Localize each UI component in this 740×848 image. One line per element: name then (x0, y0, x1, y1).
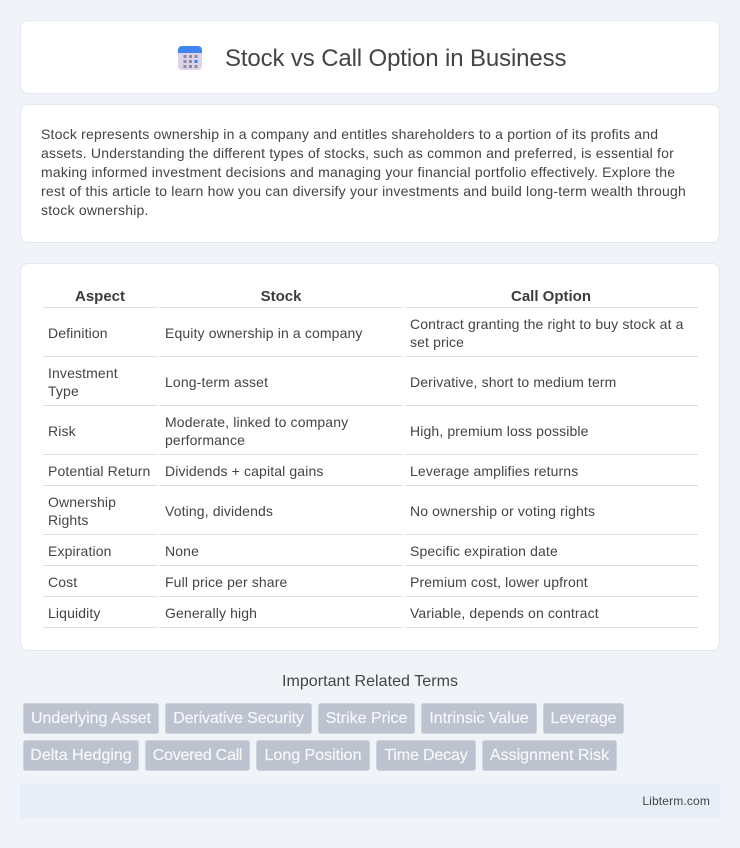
row: expiration: Specific expiration date (410, 543, 558, 559)
row: definition: Equity ownership in a company (165, 325, 363, 341)
text block: introduction: assets. Understanding the different types of stocks, such as common and preferred, is essential for (41, 145, 674, 161)
row: expiration: Expiration (48, 543, 112, 559)
row: definition: set price (410, 334, 464, 350)
icon: calendar (178, 46, 202, 70)
text block: introduction: making informed investment decisions and managing your financial portfolio effectively. Explore the (41, 164, 675, 180)
row: investment type: Investment (48, 365, 118, 381)
text block: introduction: stock ownership. (41, 202, 149, 218)
row: risk (48, 414, 589, 448)
text block: introduction (41, 126, 686, 218)
row: cost: Cost (48, 574, 77, 590)
row: liquidity (48, 605, 599, 621)
title: Stock vs Call Option in Business (225, 45, 566, 72)
row: ownership rights: Voting, dividends (165, 503, 273, 519)
tag list: related terms: Intrinsic Value (429, 710, 529, 727)
row: cost: Premium cost, lower upfront (410, 574, 588, 590)
tag list: related terms: Leverage (551, 710, 616, 727)
row: definition: Definition (48, 325, 108, 341)
panel: title header (20, 20, 720, 94)
row: risk: Moderate, linked to company (165, 414, 348, 430)
row: liquidity: Variable, depends on contract (410, 605, 599, 621)
table header (75, 288, 591, 305)
text block: introduction: Stock represents ownership in a company and entitles shareholders to a portion of its profits and (41, 126, 658, 142)
row: ownership rights: Rights (48, 512, 88, 528)
row: investment type: Long-term asset (165, 374, 268, 390)
row: potential return: Potential Return (48, 463, 150, 479)
tag list: related terms: Underlying Asset (31, 710, 151, 727)
row: cost (48, 574, 588, 590)
footer credit: Libterm.com (642, 794, 710, 808)
row: cost: Full price per share (165, 574, 287, 590)
footer (20, 784, 720, 818)
table header: Aspect (75, 288, 125, 305)
row: potential return: Dividends + capital gains (165, 463, 324, 479)
text block: introduction: rest of this article to learn how you can diversify your investments and build long-term wealth through (41, 183, 686, 199)
row: investment type: Type (48, 383, 79, 399)
row: ownership rights (48, 494, 595, 528)
row: expiration (48, 543, 558, 559)
tag list: related terms: Strike Price (326, 710, 407, 727)
tag list: related terms: Time Decay (384, 747, 468, 764)
table header: Stock (261, 288, 301, 305)
tag list: related terms: Derivative Security (173, 710, 304, 727)
row: investment type (48, 365, 616, 399)
row: expiration: None (165, 543, 199, 559)
tag list: related terms (23, 703, 624, 771)
row: potential return (48, 463, 578, 479)
row: liquidity: Generally high (165, 605, 257, 621)
tag list: related terms: Delta Hedging (30, 747, 132, 764)
tag list: related terms: Covered Call (153, 747, 242, 764)
row: definition (48, 316, 684, 350)
row: liquidity: Liquidity (48, 605, 101, 621)
row: risk: Risk (48, 423, 76, 439)
row: ownership rights: No ownership or voting rights (410, 503, 595, 519)
panel: comparison table (20, 263, 720, 651)
panel: introduction text (20, 104, 720, 243)
row: risk: High, premium loss possible (410, 423, 589, 439)
tag list: related terms: Assignment Risk (490, 747, 609, 764)
table header: Call Option (511, 288, 591, 305)
row: ownership rights: Ownership (48, 494, 116, 510)
row: investment type: Derivative, short to medium term (410, 374, 616, 390)
row: risk: performance (165, 432, 245, 448)
tag list: related terms: Long Position (265, 747, 361, 764)
row: definition: Contract granting the right to buy stock at a (410, 316, 684, 332)
row: potential return: Leverage amplifies returns (410, 463, 578, 479)
heading: important related terms: Important Related Terms (282, 673, 458, 690)
